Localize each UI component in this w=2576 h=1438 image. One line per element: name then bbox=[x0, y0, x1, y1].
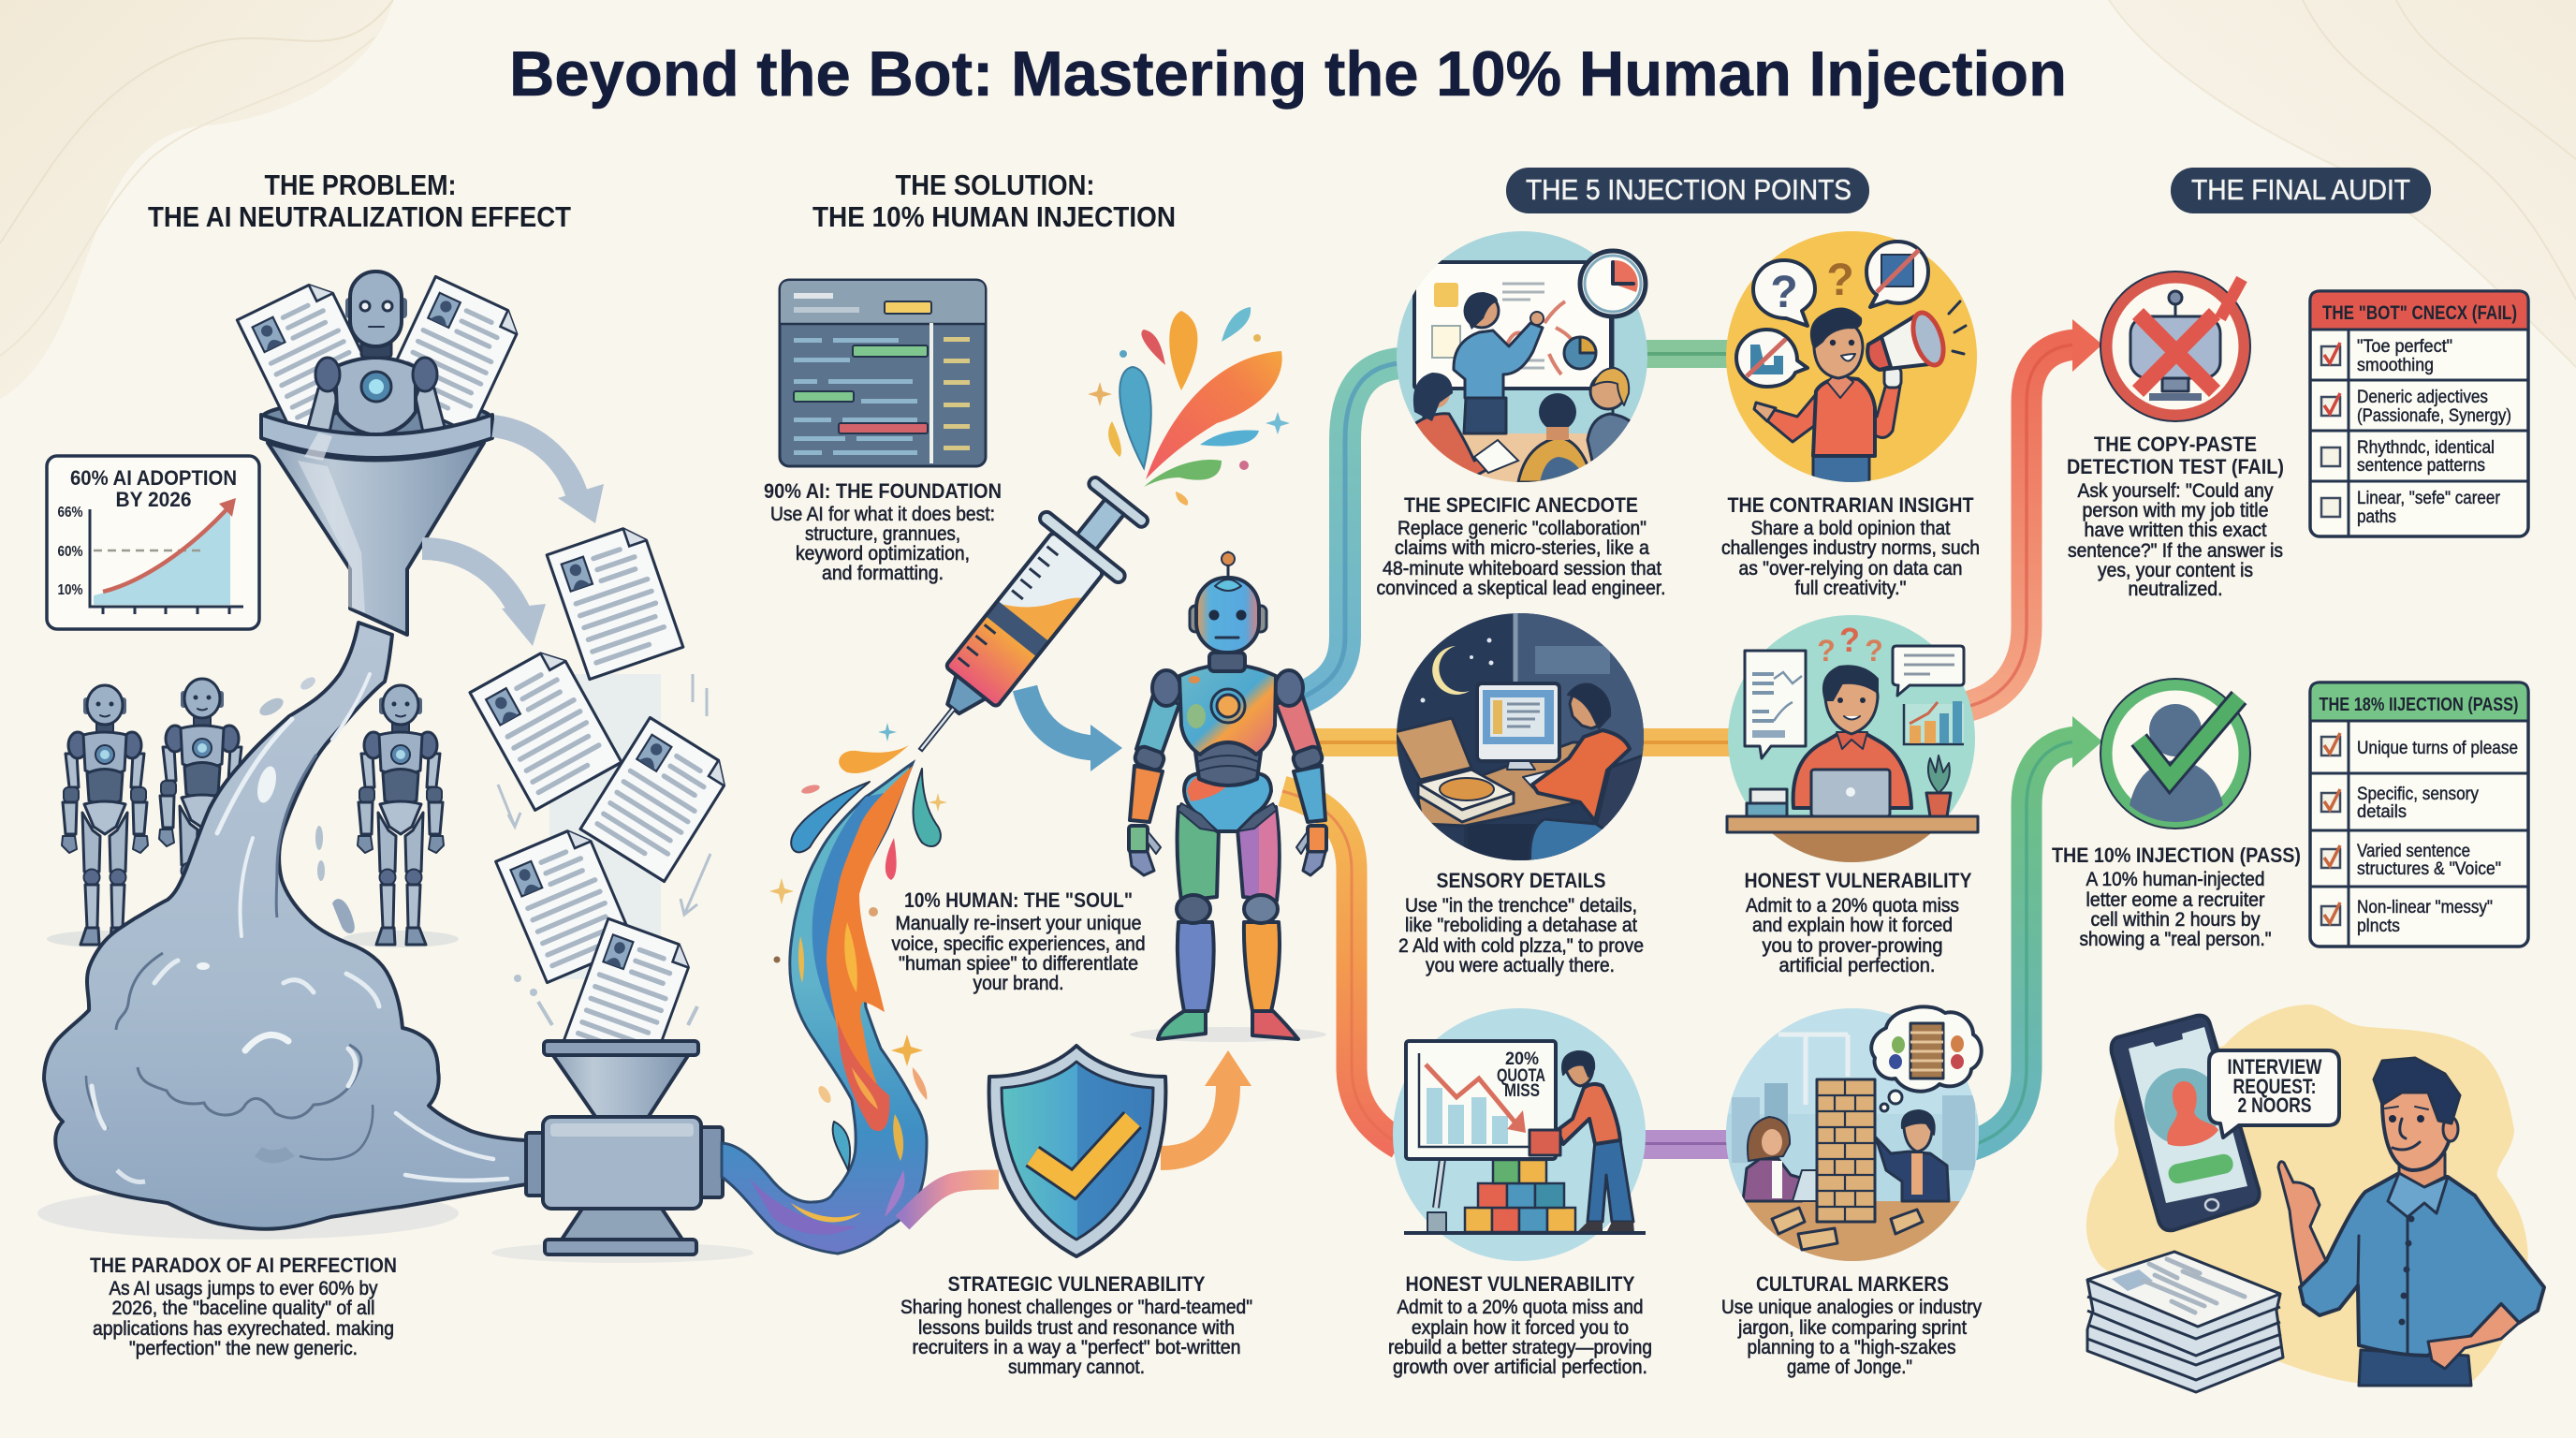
text: strategic vulnerability: summary cannot. bbox=[1008, 1357, 1145, 1378]
table: the 10% injection (pass) bbox=[2310, 682, 2528, 946]
text: honest vulnerability (middle) bbox=[1745, 869, 1971, 976]
background gray robots bbox=[47, 679, 459, 947]
text: honest vulnerability (middle): Admit to a 20% quota miss bbox=[1746, 895, 1959, 917]
man head bbox=[2382, 1077, 2452, 1170]
man resting hand bbox=[2428, 1304, 2519, 1369]
text: cultural markers: CULTURAL MARKERS bbox=[1756, 1272, 1949, 1296]
text: 10% injection (pass): letter eome a recruiter bbox=[2086, 889, 2265, 911]
phone bbox=[2112, 1016, 2260, 1230]
text: copy-paste detection test: DETECTION TEST (FAIL) bbox=[2067, 455, 2284, 478]
text: paradox of AI perfection bbox=[90, 1254, 397, 1359]
text: strategic vulnerability: STRATEGIC VULNERABILITY bbox=[947, 1272, 1206, 1296]
text: strategic vulnerability: lessons builds trust and resonance with bbox=[918, 1317, 1235, 1339]
heading: the problem: THE AI NEUTRALIZATION EFFECT bbox=[148, 200, 571, 233]
text: the specific anecdote: convinced a skeptical lead engineer. bbox=[1376, 578, 1666, 599]
table: the 10% injection (pass): details bbox=[2357, 801, 2407, 822]
screen: 90% AI bbox=[780, 280, 986, 466]
gray flow arrows bbox=[422, 426, 604, 646]
text: sensory details: you were actually there. bbox=[1426, 955, 1615, 976]
text: sensory details: like "reboliding a detahase at bbox=[1405, 915, 1637, 936]
text: the specific anecdote: 48-minute whiteboard session that bbox=[1383, 558, 1661, 580]
text: honest vulnerability (bottom): explain how it forced you to bbox=[1412, 1317, 1629, 1339]
text: strategic vulnerability bbox=[900, 1272, 1252, 1378]
text: strategic vulnerability: Sharing honest challenges or "hard-teamed" bbox=[900, 1297, 1252, 1318]
text: 10% injection (pass): showing a "real person." bbox=[2080, 929, 2271, 950]
text: 90% AI the foundation bbox=[764, 479, 1002, 584]
bubble: crossed chart bbox=[1736, 330, 1808, 387]
robot pelvis bbox=[1184, 773, 1271, 831]
table: the 10% injection (pass): Specific, sensory bbox=[2357, 784, 2479, 804]
text: cultural markers: jargon, like comparing sprint bbox=[1737, 1317, 1967, 1339]
text: sensory details: SENSORY DETAILS bbox=[1436, 869, 1606, 892]
text: 10% human the soul: voice, specific experiences, and bbox=[891, 933, 1146, 955]
colored splash above syringe bbox=[1088, 307, 1290, 506]
icon: fail robot crossed out bbox=[2100, 271, 2250, 421]
main colourful robot bbox=[1129, 552, 1326, 1042]
text: honest vulnerability (middle): you to prover-prowing bbox=[1762, 935, 1943, 957]
strategic shield bbox=[902, 1046, 1251, 1256]
circle: quota miss bbox=[1393, 1008, 1646, 1261]
heading: the solution: THE 10% HUMAN INJECTION bbox=[812, 200, 1176, 233]
funnel back interior bbox=[261, 400, 491, 437]
syringe bbox=[879, 464, 1164, 784]
table: the bot check (fail): Linear, "sefe" career bbox=[2357, 488, 2500, 508]
circle: contrarian insight bbox=[1726, 231, 1977, 484]
robot legs bbox=[1158, 807, 1298, 1039]
text: paradox of AI perfection: As AI usags jumps to ever 60% by bbox=[109, 1278, 378, 1299]
text: paradox of AI perfection: applications has exyrechated. making bbox=[93, 1318, 394, 1340]
pill heading: the final audit bbox=[2171, 168, 2431, 213]
text: copy-paste detection test: sentence?" If the answer is bbox=[2068, 540, 2283, 562]
table: the bot check (fail): Deneric adjectives bbox=[2357, 387, 2488, 407]
table: the 10% injection (pass): Varied sentence bbox=[2357, 841, 2470, 861]
text: 10% human the soul: "human spiee" to differentlate bbox=[899, 953, 1138, 975]
adoption chart card: 10% bbox=[58, 582, 82, 598]
text: strategic vulnerability: recruiters in a way a "perfect" bot-written bbox=[912, 1337, 1241, 1358]
text: the specific anecdote bbox=[1376, 493, 1666, 599]
adoption chart card: BY 2026 bbox=[116, 488, 191, 511]
table: the bot check (fail): sentence patterns bbox=[2357, 455, 2485, 476]
man shirt bbox=[2300, 1173, 2544, 1356]
connector pipes bbox=[1282, 319, 2102, 1159]
text: the contrarian insight: full creativity." bbox=[1795, 578, 1906, 599]
robot and resumes in funnel bbox=[237, 271, 524, 435]
text: honest vulnerability (bottom) bbox=[1388, 1272, 1652, 1378]
speech bubble: interview request: 2 NOORS bbox=[2237, 1093, 2312, 1117]
funnel bbox=[261, 415, 492, 635]
text: 90% AI the foundation: and formatting. bbox=[822, 563, 944, 584]
text: paradox of AI perfection: THE PARADOX OF AI PERFECTION bbox=[90, 1254, 397, 1277]
blue arrow syringe to robot bbox=[1025, 688, 1122, 771]
circle: quota miss: 20% bbox=[1505, 1049, 1539, 1069]
text: the contrarian insight bbox=[1721, 493, 1980, 599]
speech bubble: interview request: REQUEST: bbox=[2233, 1075, 2316, 1098]
text: copy-paste detection test: neutralized. bbox=[2129, 579, 2222, 600]
text: honest vulnerability (middle): and explain how it forced bbox=[1752, 915, 1953, 936]
rainbow stream bbox=[722, 763, 927, 1254]
circle: quota miss: QUOTA bbox=[1497, 1066, 1545, 1086]
adoption chart card bbox=[47, 456, 259, 629]
table: the 10% injection (pass): plncts bbox=[2357, 916, 2400, 936]
robot neck bbox=[1209, 653, 1245, 671]
circle: cultural markers bbox=[1725, 1006, 1982, 1271]
yellow blob behind success scene bbox=[2086, 1005, 2528, 1383]
text: copy-paste detection test: person with my job title bbox=[2082, 500, 2269, 521]
text: honest vulnerability (bottom): Admit to a 20% quota miss and bbox=[1397, 1297, 1644, 1318]
text: copy-paste detection test: THE COPY-PASTE bbox=[2094, 433, 2257, 456]
text: cultural markers: Use unique analogies or industry bbox=[1721, 1297, 1982, 1318]
text: 10% injection (pass): cell within 2 hours by bbox=[2091, 909, 2261, 931]
adoption chart card: 66% bbox=[58, 505, 82, 521]
circle: honest vulnerability desk: ? bbox=[1817, 634, 1836, 668]
table: the 10% injection (pass): Unique turns of please bbox=[2357, 738, 2518, 758]
text: paradox of AI perfection: 2026, the "baceline quality" of all bbox=[112, 1298, 374, 1319]
text: 90% AI the foundation: structure, grannues, bbox=[805, 523, 960, 545]
table: the bot check (fail): smoothing bbox=[2357, 355, 2434, 375]
text: honest vulnerability (middle): artificial perfection. bbox=[1778, 955, 1936, 976]
table: the 10% injection (pass): structures & "Voice" bbox=[2357, 858, 2501, 879]
table: the bot check (fail) bbox=[2310, 291, 2528, 536]
text: honest vulnerability (bottom): rebuild a better strategy—proving bbox=[1388, 1337, 1652, 1358]
circle: honest vulnerability desk bbox=[1727, 615, 1978, 875]
speech bubble: interview request: INTERVIEW bbox=[2228, 1055, 2322, 1078]
man trousers bbox=[2359, 1350, 2471, 1386]
text: 10% human the soul bbox=[891, 888, 1146, 994]
text: honest vulnerability (bottom): growth over artificial perfection. bbox=[1393, 1357, 1647, 1378]
table: the 10% injection (pass): Non-linear "messy" bbox=[2357, 897, 2493, 917]
text: copy-paste detection test: yes, your content is bbox=[2098, 560, 2253, 581]
adoption chart card: 60% bbox=[58, 544, 82, 560]
pill heading: the 5 injection points bbox=[1506, 168, 1869, 213]
pill heading: the final audit: THE FINAL AUDIT bbox=[2191, 173, 2410, 206]
text: honest vulnerability (middle): HONEST VULNERABILITY bbox=[1745, 869, 1971, 892]
text: paradox of AI perfection: "perfection" the new generic. bbox=[129, 1338, 358, 1359]
text: copy-paste detection test: Ask yourself: "Could any bbox=[2078, 480, 2274, 502]
robot torso bbox=[1179, 665, 1276, 755]
table: the bot check (fail): (Passionafe, Synergy) bbox=[2357, 405, 2511, 426]
text: sensory details bbox=[1398, 869, 1644, 976]
text: sensory details: Use "in the trenchce" details, bbox=[1405, 895, 1637, 917]
man neck bbox=[2399, 1153, 2445, 1187]
heading: the problem: THE PROBLEM: bbox=[264, 169, 457, 201]
grinder machine bbox=[491, 1041, 754, 1263]
robot left arm bbox=[1129, 670, 1180, 875]
circle: quota miss: MISS bbox=[1504, 1081, 1540, 1101]
circle: specific anecdote bbox=[1395, 231, 1647, 490]
text: 10% injection (pass): THE 10% INJECTION (PASS) bbox=[2052, 844, 2301, 867]
text: 10% human the soul: your brand. bbox=[973, 973, 1063, 994]
text: 90% AI the foundation: Use AI for what it does best: bbox=[770, 504, 995, 525]
circle: sensory details bbox=[1395, 609, 1648, 871]
text: 10% injection (pass) bbox=[2052, 844, 2301, 950]
text: the specific anecdote: Replace generic "collaboration" bbox=[1398, 518, 1647, 539]
pill heading: the 5 injection points: THE 5 INJECTION POINTS bbox=[1526, 173, 1852, 206]
heading: the solution bbox=[812, 169, 1176, 233]
text: sensory details: 2 Ald with cold plzza," to prove bbox=[1398, 935, 1644, 957]
text: 10% injection (pass): A 10% human-injected bbox=[2086, 869, 2265, 890]
text: 10% human the soul: 10% HUMAN: THE "SOUL" bbox=[904, 888, 1133, 912]
text: the contrarian insight: Share a bold opinion that bbox=[1750, 518, 1951, 539]
robot right arm bbox=[1275, 670, 1326, 875]
bubble: question: ? bbox=[1770, 268, 1798, 317]
table: the bot check (fail): Rhythndc, identical bbox=[2357, 437, 2495, 458]
table: the bot check (fail): "Toe perfect" bbox=[2357, 336, 2452, 357]
text: the specific anecdote: THE SPECIFIC ANECDOTE bbox=[1404, 493, 1638, 517]
text: 10% human the soul: Manually re-insert your unique bbox=[895, 913, 1142, 934]
circle: honest vulnerability desk: ? bbox=[1839, 621, 1860, 659]
text: copy-paste detection test bbox=[2067, 433, 2284, 600]
adoption chart card: 60% AI ADOPTION bbox=[70, 466, 237, 490]
text: the contrarian insight: as "over-relying on data can bbox=[1739, 558, 1962, 580]
icon: pass person with check bbox=[2100, 679, 2250, 829]
text: the contrarian insight: THE CONTRARIAN INSIGHT bbox=[1728, 493, 1974, 517]
man left arm bbox=[1767, 394, 1814, 444]
gray slurry blob and stream bbox=[37, 623, 526, 1240]
text: cultural markers bbox=[1721, 1272, 1982, 1378]
table: the bot check (fail): THE "BOT" CNECX (FAIL) bbox=[2322, 302, 2517, 324]
table: the 10% injection (pass): THE 18% IIJECTION (PASS) bbox=[2320, 695, 2518, 715]
speech bubble: interview request bbox=[2209, 1050, 2339, 1137]
man pointing hand bbox=[2278, 1162, 2340, 1290]
text: honest vulnerability (bottom): HONEST VULNERABILITY bbox=[1406, 1272, 1634, 1296]
heading: the problem bbox=[148, 169, 571, 233]
orange question mark: ? bbox=[1826, 256, 1854, 305]
text: copy-paste detection test: have written this exact bbox=[2084, 520, 2267, 541]
text: the contrarian insight: challenges industry norms, such bbox=[1721, 537, 1980, 559]
falling resumes bbox=[470, 522, 734, 1074]
heading: the solution: THE SOLUTION: bbox=[895, 169, 1095, 201]
bubble: crossed grid bbox=[1866, 242, 1928, 307]
resume stack bbox=[2087, 1252, 2283, 1392]
text: cultural markers: planning to a "high-szakes bbox=[1747, 1337, 1956, 1358]
text: 90% AI the foundation: 90% AI: THE FOUNDATION bbox=[764, 479, 1002, 503]
text: cultural markers: game of Jonge." bbox=[1787, 1357, 1912, 1378]
circle: honest vulnerability desk: ? bbox=[1865, 634, 1883, 668]
megaphone bbox=[1867, 301, 1966, 370]
smiling man pointing at phone bbox=[2278, 1058, 2544, 1386]
text: 90% AI the foundation: keyword optimization, bbox=[796, 543, 970, 565]
text: the specific anecdote: claims with micro-steries, like a bbox=[1395, 537, 1649, 559]
robot head bbox=[1190, 552, 1266, 653]
bubble: question bbox=[1753, 260, 1815, 326]
table: the bot check (fail): paths bbox=[2357, 506, 2396, 527]
title: Beyond the Bot: Mastering the 10% Human Injection bbox=[509, 38, 2067, 110]
robot belt bbox=[1195, 741, 1261, 785]
splash droplets near needle bbox=[769, 723, 947, 1170]
